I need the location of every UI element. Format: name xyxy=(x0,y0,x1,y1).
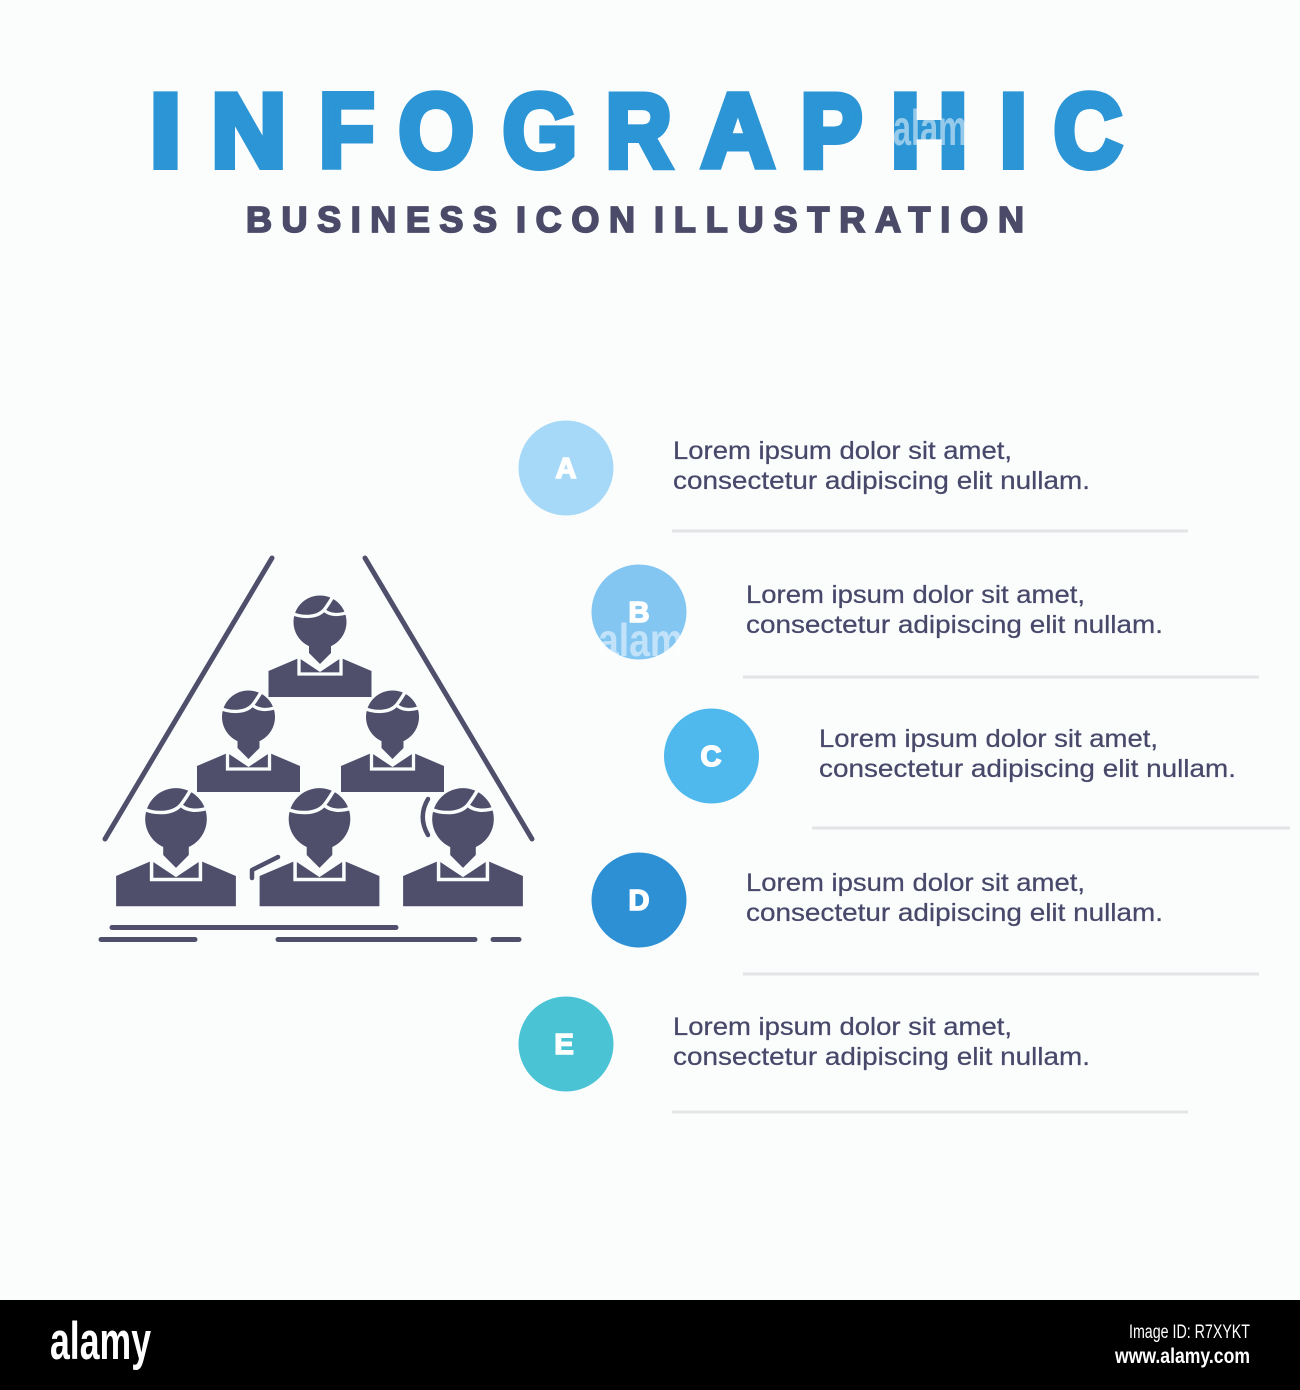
badge B: B xyxy=(629,597,649,629)
watermark marks: alam xyxy=(598,614,683,666)
text E: Lorem ipsum dolor sit amet, xyxy=(673,1013,1012,1041)
title: C xyxy=(1054,73,1122,190)
badge C: C xyxy=(701,741,722,773)
person bottom right xyxy=(403,785,523,906)
image id: Image ID: R7XYKT xyxy=(1129,1322,1250,1343)
title: I xyxy=(1000,73,1027,189)
watermark marks: alam xyxy=(893,100,967,156)
title: H xyxy=(890,73,968,189)
accent strokes xyxy=(252,799,428,878)
badge A xyxy=(518,420,614,516)
badge E: E xyxy=(554,1029,574,1061)
title xyxy=(150,72,1122,190)
step A xyxy=(518,420,1188,532)
title: I xyxy=(150,73,181,189)
website: www.alamy.com xyxy=(1114,1345,1250,1368)
badge C xyxy=(664,708,759,804)
text B: Lorem ipsum dolor sit amet, xyxy=(746,581,1085,609)
left pyramid side xyxy=(105,558,272,839)
subtitle: ILLUSTRATION xyxy=(654,199,1024,240)
badge D: D xyxy=(629,885,649,917)
text D xyxy=(746,869,1163,927)
watermark marks xyxy=(598,100,967,666)
badge A: A xyxy=(556,453,577,485)
right pyramid side xyxy=(365,558,532,839)
badge D xyxy=(592,852,686,948)
text A: consectetur adipiscing elit nullam. xyxy=(673,467,1090,495)
title: F xyxy=(319,73,374,189)
text C: Lorem ipsum dolor sit amet, xyxy=(819,725,1158,753)
subtitle: BUSINESS xyxy=(246,199,497,240)
text B: consectetur adipiscing elit nullam. xyxy=(746,611,1163,639)
title: P xyxy=(800,72,862,189)
badge E xyxy=(518,996,614,1092)
icon: team pyramid xyxy=(101,558,532,940)
subtitle: ICON xyxy=(516,199,635,240)
text B xyxy=(746,581,1163,639)
text E: consectetur adipiscing elit nullam. xyxy=(673,1043,1090,1071)
step B xyxy=(592,564,1259,678)
text D: Lorem ipsum dolor sit amet, xyxy=(746,869,1085,897)
badge B xyxy=(592,564,686,660)
ground lines xyxy=(101,928,519,940)
person bottom left xyxy=(116,785,236,906)
text D: consectetur adipiscing elit nullam. xyxy=(746,899,1163,927)
step D xyxy=(592,852,1259,976)
text C: consectetur adipiscing elit nullam. xyxy=(819,755,1236,783)
title: R xyxy=(606,72,672,189)
text A: Lorem ipsum dolor sit amet, xyxy=(673,437,1012,465)
text C xyxy=(819,725,1236,783)
title: O xyxy=(399,73,474,189)
title: N xyxy=(211,74,286,190)
person middle right xyxy=(341,688,444,792)
person top xyxy=(268,593,372,697)
step E xyxy=(518,996,1188,1114)
text A xyxy=(673,437,1090,495)
person middle left xyxy=(197,688,300,792)
footer logo: alamy xyxy=(50,1312,151,1371)
title: A xyxy=(702,72,774,189)
subtitle xyxy=(246,199,1024,240)
footer bar xyxy=(0,1300,1300,1390)
text E xyxy=(673,1013,1090,1071)
person bottom centre xyxy=(260,785,379,906)
step C xyxy=(664,708,1290,830)
title: G xyxy=(503,74,577,189)
